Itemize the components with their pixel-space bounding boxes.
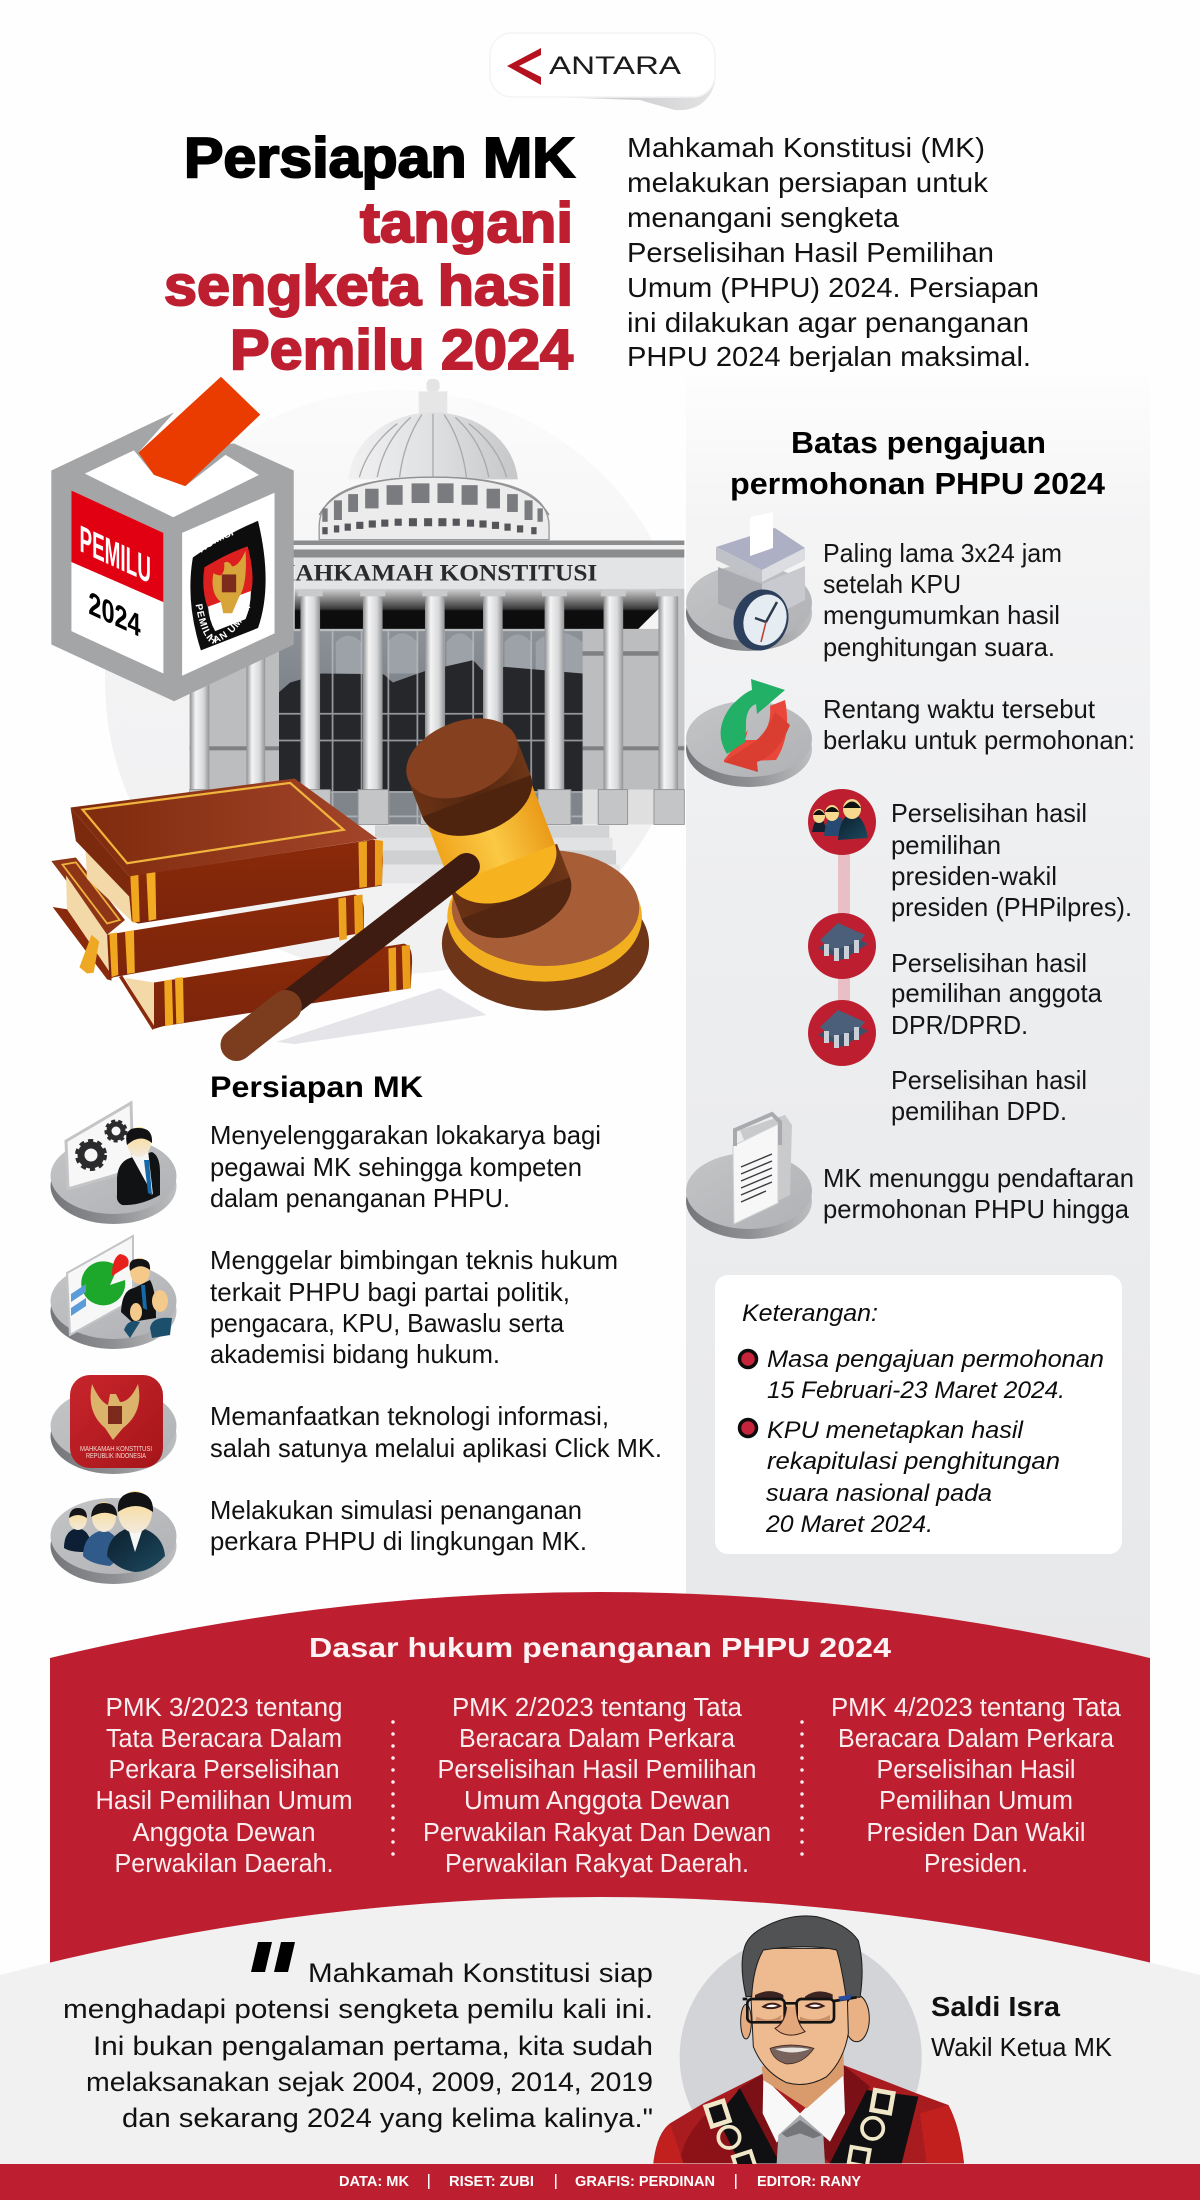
column: PMK 4/2023: Beracara Dalam Perkara: [838, 1725, 1115, 1753]
title: Pemilu 2024: [230, 318, 573, 382]
intro text: Perselisihan Hasil Pemilihan: [627, 237, 994, 268]
text: batas 2: berlaku untuk permohonan:: [823, 725, 1135, 755]
column: PMK 4/2023: [831, 1694, 1122, 1878]
panel: batas pengajuan heading: [730, 425, 1106, 501]
text: persiapan 2: pengacara, KPU, Bawaslu serta: [210, 1308, 565, 1338]
panel: keterangan: [715, 1275, 1122, 1554]
text: permohonan list: Perselisihan hasil: [891, 948, 1087, 978]
panel: keterangan: Masa pengajuan permohonan: [767, 1346, 1104, 1373]
text: permohonan list: DPR/DPRD.: [891, 1010, 1028, 1040]
text: batas 1: setelah KPU: [823, 569, 961, 599]
logo: ANTARA: ANTARA: [549, 52, 681, 80]
quote section background: [0, 1897, 1200, 2170]
text: persiapan 2: terkait PHPU bagi partai politik,: [210, 1277, 570, 1307]
icon: ballot box with clock: [686, 512, 812, 658]
column: PMK 3/2023: Perkara Perselisihan: [108, 1756, 340, 1784]
text: persiapan 2: [210, 1245, 618, 1369]
panel: keterangan: KPU menetapkan hasil: [767, 1417, 1024, 1444]
logo: ANTARA: [490, 33, 715, 110]
illustration: gavel: [237, 703, 649, 1045]
name: Saldi Isra: Saldi Isra: [931, 1991, 1060, 2022]
text: persiapan 2: Menggelar bimbingan teknis hukum: [210, 1245, 618, 1275]
intro text: melakukan persiapan untuk: [627, 167, 989, 198]
text: batas 3: permohonan PHPU hingga: [823, 1194, 1130, 1224]
title: sengketa hasil: [164, 254, 573, 318]
text: permohonan list: Perselisihan hasil: [891, 798, 1087, 828]
text: batas 1: Paling lama 3x24 jam: [823, 538, 1062, 568]
icon: presidential candidates: [808, 789, 876, 855]
title: tangani: [360, 191, 573, 255]
text: permohonan list: pemilihan DPD.: [891, 1096, 1067, 1126]
text: permohonan list: Perselisihan hasil: [891, 1065, 1087, 1095]
quote text: Mahkamah Konstitusi siap: [308, 1958, 653, 1988]
column: PMK 2/2023: Beracara Dalam Perkara: [459, 1725, 736, 1753]
heading: Persiapan MK: Persiapan MK: [210, 1071, 423, 1104]
icon: KPU emblem: PEMILIHAN UMUM: [196, 604, 250, 644]
text: persiapan 3: [210, 1401, 662, 1463]
illustration: Mahkamah Konstitusi building: [190, 379, 684, 883]
text: permohonan list: pemilihan anggota: [891, 978, 1103, 1008]
illustration: ballot box: PEMILU: [79, 518, 151, 592]
text: batas 3: MK menunggu pendaftaran: [823, 1163, 1134, 1193]
icon: three people: [50, 1491, 176, 1584]
text: persiapan 4: perkara PHPU di lingkungan MK.: [210, 1526, 587, 1556]
connector line: [838, 850, 850, 1005]
icon: Click MK app: MAHKAMAH KONSTITUSI: [80, 1446, 152, 1453]
column: PMK 2/2023: Perwakilan Rakyat Dan Dewan: [423, 1819, 771, 1847]
icon: parliament building one: [808, 913, 876, 979]
panel: batas pengajuan background: [686, 365, 1150, 1705]
panel: keterangan: 15 Februari-23 Maret 2024.: [767, 1377, 1065, 1404]
footer credits: GRAFIS: PERDINAN: [575, 2174, 715, 2190]
icon: documents: [686, 1114, 812, 1239]
panel: batas pengajuan heading: Batas pengajuan: [791, 425, 1046, 460]
quote text: melaksanakan sejak 2004, 2009, 2014, 2019: [86, 2067, 653, 2097]
icon: parliament building two: [808, 1000, 876, 1066]
text: batas 1: penghitungan suara.: [823, 632, 1055, 662]
icon: quotation mark: [251, 1942, 295, 1972]
column: PMK 3/2023: [96, 1694, 352, 1878]
name: Saldi Isra: Wakil Ketua MK: [931, 2032, 1113, 2062]
column: PMK 4/2023: PMK 4/2023 tentang Tata: [831, 1694, 1122, 1722]
panel: batas pengajuan heading: permohonan PHPU 2024: [730, 466, 1106, 501]
quote text: [63, 1958, 653, 2133]
illustration: court, ballot box, books, gavel: [51, 376, 685, 1061]
icon: Click MK app: [50, 1375, 176, 1474]
text: persiapan 1: Menyelenggarakan lokakarya bagi: [210, 1120, 601, 1150]
text: permohonan list: presiden-wakil: [891, 861, 1057, 891]
panel: keterangan: 20 Maret 2024.: [765, 1511, 933, 1538]
footer credits: RISET: ZUBI: [449, 2174, 534, 2190]
text: batas 1: [823, 538, 1062, 662]
panel: keterangan: Keterangan:: [742, 1300, 878, 1327]
intro text: Mahkamah Konstitusi (MK): [627, 132, 985, 163]
portrait: Saldi Isra: [653, 1916, 964, 2178]
column: PMK 2/2023: Perselisihan Hasil Pemilihan: [438, 1756, 756, 1784]
text: permohonan list: pemilihan: [891, 830, 1001, 860]
name: Saldi Isra: [931, 1991, 1113, 2062]
quote text: Ini bukan pengalaman pertama, kita sudah: [93, 2031, 653, 2061]
text: persiapan 1: pegawai MK sehingga kompeten: [210, 1152, 582, 1182]
illustration: Mahkamah Konstitusi building: MAHKAMAH KONSTITUSI: [271, 561, 597, 587]
text: batas 1: mengumumkan hasil: [823, 600, 1060, 630]
text: persiapan 1: dalam penanganan PHPU.: [210, 1183, 510, 1213]
column: PMK 3/2023: PMK 3/2023 tentang: [106, 1694, 342, 1722]
column: PMK 3/2023: Tata Beracara Dalam: [106, 1725, 342, 1753]
intro text: menangani sengketa: [627, 202, 899, 233]
column: PMK 3/2023: Anggota Dewan: [132, 1819, 316, 1847]
text: persiapan 4: [210, 1495, 587, 1556]
icon: Click MK app: REPUBLIK INDONESIA: [86, 1453, 146, 1460]
column: PMK 4/2023: Presiden.: [924, 1850, 1028, 1878]
text: persiapan 4: Melakukan simulasi penanganan: [210, 1495, 582, 1525]
illustration: stack of law books: [51, 778, 412, 1029]
footer credits: EDITOR: RANY: [757, 2174, 861, 2190]
bullet: [740, 1420, 756, 1436]
text: persiapan 1: [210, 1120, 601, 1213]
column: PMK 4/2023: Perselisihan Hasil: [876, 1756, 1076, 1784]
text: persiapan 3: Memanfaatkan teknologi informasi,: [210, 1401, 609, 1431]
text: permohonan list: [891, 798, 1132, 1126]
column: PMK 4/2023: Presiden Dan Wakil: [866, 1819, 1086, 1847]
quote text: menghadapi potensi sengketa pemilu kali ini.: [63, 1994, 653, 2024]
text: batas 3: [823, 1163, 1134, 1224]
intro text: PHPU 2024 berjalan maksimal.: [627, 341, 1031, 372]
intro text: [627, 132, 1039, 372]
text: permohonan list: presiden (PHPilpres).: [891, 892, 1132, 922]
panel: keterangan: rekapitulasi penghitungan: [767, 1448, 1060, 1475]
panel: keterangan: suara nasional pada: [766, 1480, 992, 1507]
text: persiapan 3: salah satunya melalui aplikasi Click MK.: [210, 1433, 662, 1463]
column: PMK 4/2023: Pemilihan Umum: [879, 1787, 1073, 1815]
title: Persiapan MK: [184, 126, 575, 190]
illustration: ballot box: [51, 376, 294, 702]
shadow under gavel: [277, 988, 487, 1044]
heading: dasar hukum: Dasar hukum penanganan PHPU 2024: [309, 1632, 892, 1663]
icon: KPU emblem: [190, 520, 266, 650]
title: [164, 126, 575, 382]
footer credits: DATA: MK: [339, 2174, 410, 2190]
icon: technical guidance presenter: [50, 1236, 176, 1349]
column: PMK 2/2023: Perwakilan Rakyat Daerah.: [445, 1850, 749, 1878]
column: PMK 2/2023: [423, 1694, 771, 1878]
column: PMK 2/2023: PMK 2/2023 tentang Tata: [452, 1694, 743, 1722]
text: batas 2: [823, 694, 1135, 755]
panel: dasar hukum red band: [50, 1592, 1150, 1985]
footer credits: [0, 2164, 1200, 2200]
icon: workshop presenter: [50, 1103, 176, 1224]
intro text: Umum (PHPU) 2024. Persiapan: [627, 272, 1039, 303]
icon: cycle arrows: [686, 679, 812, 787]
column: PMK 3/2023: Perwakilan Daerah.: [114, 1850, 334, 1878]
text: batas 2: Rentang waktu tersebut: [823, 694, 1096, 724]
illustration: ballot box: 2024: [88, 585, 141, 645]
intro text: ini dilakukan agar penanganan: [627, 307, 1029, 338]
text: persiapan 2: akademisi bidang hukum.: [210, 1339, 500, 1369]
column: PMK 3/2023: Hasil Pemilihan Umum: [96, 1787, 352, 1815]
column: PMK 2/2023: Umum Anggota Dewan: [464, 1787, 730, 1815]
icon: KPU emblem: KOMISI: [201, 532, 234, 553]
bullet: [740, 1350, 756, 1368]
quote text: dan sekarang 2024 yang kelima kalinya.": [122, 2103, 653, 2133]
background circle behind illustration: [105, 390, 686, 974]
